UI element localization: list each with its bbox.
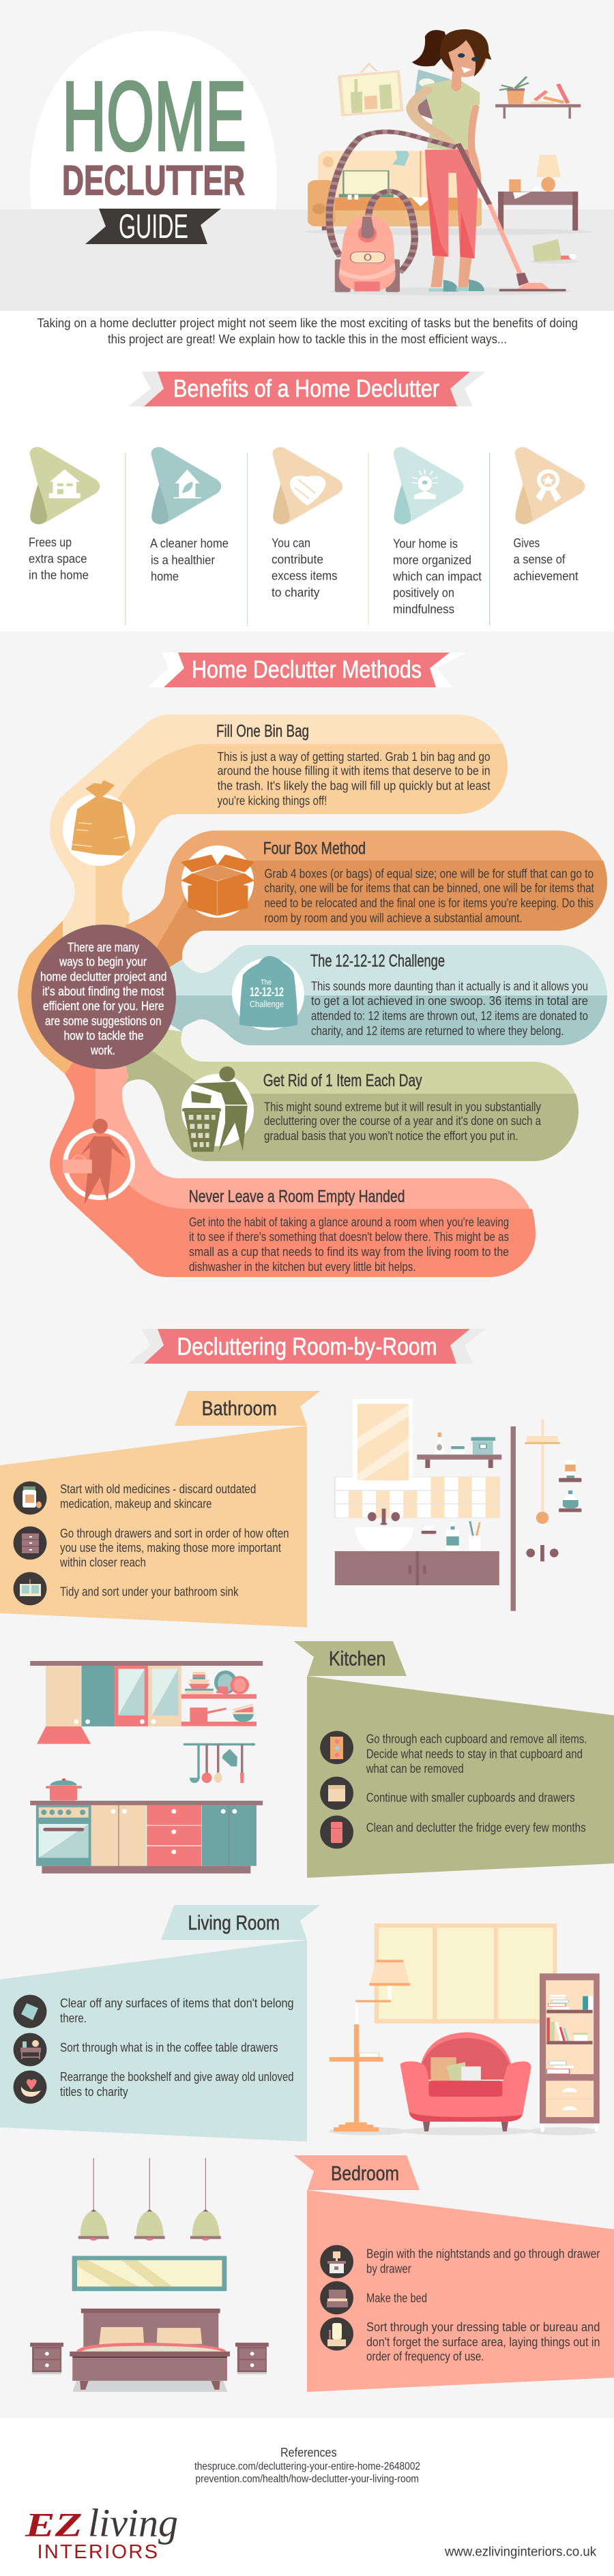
panel: kitchen [30, 1641, 614, 1878]
logo: EZ living interiors [25, 2501, 178, 2563]
icon: bed [320, 2281, 353, 2314]
logo: EZ living interiors: INTERIORS [37, 2541, 158, 2563]
method: never leave a room empty handed [50, 1050, 536, 1277]
benefit text: free space: Frees up [29, 536, 72, 550]
panel: bedroom [30, 2155, 614, 2392]
logo: EZ living interiors: EZ [25, 2505, 82, 2543]
heading: living room: Living Room [188, 1912, 280, 1934]
method: fill one bin bag: around the house filling it with items that deserve to be in [218, 764, 491, 778]
center circle with intro: ways to begin your [59, 955, 147, 969]
icon: hands with heart [14, 2071, 46, 2103]
icon: coffee table [14, 2033, 46, 2066]
method: four box: Four Box Method [263, 839, 366, 858]
method: 12-12-12 challenge: The 12-12-12 Challenge [310, 952, 445, 971]
center circle with intro [31, 925, 176, 1069]
icon: small cupboard [320, 1777, 353, 1810]
intro text: this project are great! We explain how to tackle this in the most efficient ways... [108, 333, 507, 346]
method: fill one bin bag [50, 715, 508, 941]
benefit text: free space: extra space [29, 552, 87, 566]
intro text [37, 316, 578, 346]
method: never leave a room empty handed: small as a cup that needs to find its way from the living room to the [189, 1245, 509, 1259]
bedroom text [366, 2247, 600, 2363]
method: one item each day [109, 1030, 579, 1161]
illustration: kitchen [30, 1661, 263, 1874]
center circle with intro: are some suggestions on [45, 1014, 161, 1028]
benefit text: charity: You can [272, 537, 310, 550]
benefit text: healthier: A cleaner home [150, 537, 229, 550]
kitchen text: what can be removed [366, 1762, 464, 1776]
references [194, 2446, 420, 2485]
banner: methods heading [148, 653, 466, 687]
icon: person carrying bag [63, 1119, 126, 1205]
title: DECLUTTER [62, 157, 245, 203]
icon: nightstand [320, 2245, 353, 2278]
kitchen text: Continue with smaller cupboards and drawers [366, 1791, 575, 1805]
left orange band [18, 920, 109, 1074]
hero background [0, 0, 614, 311]
heading: bedroom: Bedroom [331, 2162, 399, 2185]
references: References [280, 2446, 337, 2459]
icon: teal bag with label: 12-12-12 [250, 985, 284, 999]
method: fill one bin bag: the trash. It's likely the bag will fill up quickly but at least [218, 779, 491, 793]
icon: cardboard box [181, 854, 254, 916]
panel: methods flow [18, 715, 607, 1277]
title [62, 61, 246, 245]
living room text: there. [60, 2011, 87, 2025]
method: 12-12-12 challenge: charity, and 12 items are returned to where they belong. [311, 1024, 564, 1038]
method: never leave a room empty handed: dishwasher in the kitchen but every little bit helps. [189, 1260, 416, 1274]
method: never leave a room empty handed: Get into the habit of taking a glance around a room when you're leaving [189, 1216, 509, 1229]
icon: teal bag with label: Challenge [250, 999, 284, 1009]
center circle with intro: home declutter project and [40, 970, 166, 983]
living room text: Rearrange the bookshelf and give away old unloved [60, 2070, 293, 2084]
illustration: bedroom [30, 2158, 269, 2392]
benefit text: mindfulness: which can impact [392, 570, 482, 584]
method: fill one bin bag: Fill One Bin Bag [216, 722, 309, 741]
benefit text: achievement [513, 537, 579, 583]
method: one item each day: gradual basis that you won't notice the effort you put in. [264, 1129, 518, 1143]
benefit text: charity: contribute [272, 553, 323, 567]
illustration: bathroom [335, 1399, 581, 1611]
banner: room-by-room heading: Decluttering Room-by-Room [177, 1332, 437, 1360]
bedroom text: Make the bed [366, 2291, 427, 2305]
benefit text: mindfulness: more organized [393, 554, 471, 567]
benefit icon: eco house [151, 447, 221, 524]
references: thespruce.com/decluttering-your-entire-home-2648002 [194, 2461, 420, 2472]
method: 12-12-12 challenge: to get a lot achieved in one swoop. 36 items in total are [311, 994, 588, 1008]
method: never leave a room empty handed: Never Leave a Room Empty Handed [189, 1187, 405, 1206]
living room text: Sort through what is in the coffee table drawers [60, 2041, 278, 2054]
bedroom text: by drawer [366, 2262, 411, 2275]
banner: benefits heading: Benefits of a Home Declutter [173, 374, 439, 402]
benefit icon: house [30, 447, 100, 524]
benefit text: mindfulness [392, 537, 482, 616]
method: one item each day: This might sound extreme but it will result in you substantially [264, 1100, 541, 1113]
center circle with intro: There are many [68, 941, 139, 955]
method: fill one bin bag: you're kicking things off! [218, 794, 327, 808]
method: one item each day: decluttering over the course of a year and it's done on such a [264, 1114, 542, 1128]
center circle with intro: work. [90, 1044, 115, 1058]
benefit text: charity: excess items [272, 569, 337, 583]
benefit icon: heart handshake [272, 447, 342, 524]
benefit text: free space [29, 536, 89, 582]
banner: room-by-room heading [128, 1329, 486, 1364]
method: four box [123, 830, 607, 982]
heading: bathroom: Bathroom [202, 1398, 277, 1420]
benefit text: charity: to charity [272, 586, 319, 599]
method: never leave a room empty handed: it to see if there's something that doesn't below there. This might be as [189, 1230, 509, 1244]
title: HOME [62, 61, 246, 171]
icon: drawers [14, 1527, 46, 1559]
panel: benefits [29, 447, 585, 625]
icon: bin bag [71, 780, 130, 856]
icon: teal bag with label [239, 956, 297, 1028]
references: prevention.com/health/how-declutter-your-living-room [195, 2474, 419, 2485]
living room text: Clear off any surfaces of items that don't belong [60, 1996, 293, 2010]
benefit text: mindfulness: Your home is [393, 537, 458, 550]
bathroom text: Go through drawers and sort in order of how often [60, 1527, 289, 1540]
logo: EZ living interiors: living [88, 2501, 178, 2545]
icon: dressing table [320, 2318, 353, 2350]
benefit text: mindfulness: positively on [393, 586, 454, 600]
benefit text: achievement: Gives [513, 537, 540, 550]
center circle with intro: how to tackle the [64, 1029, 143, 1043]
intro text: Taking on a home declutter project might not seem like the most exciting of tasks but the benefits of doing [37, 316, 578, 330]
banner: methods heading: Home Declutter Methods [192, 655, 422, 683]
method: four box: room by room and you will achieve a substantial amount. [265, 912, 523, 925]
benefit text: healthier: home [151, 570, 179, 584]
benefit text: charity [272, 537, 337, 599]
website url: www.ezlivinginteriors.co.uk [444, 2545, 596, 2560]
bathroom text: medication, makeup and skincare [60, 1497, 211, 1511]
method: one item each day: Get Rid of 1 Item Each Day [263, 1071, 422, 1090]
method: 12-12-12 challenge [157, 945, 607, 1045]
bathroom text: you use the items, making those more important [60, 1541, 281, 1555]
panel: living room [0, 1905, 600, 2142]
benefit text: achievement: achievement [513, 569, 579, 583]
benefit icon: award rosette [515, 447, 585, 524]
kitchen text [366, 1733, 587, 1835]
benefit text: achievement: a sense of [513, 553, 566, 567]
benefit text: healthier: is a healthier [151, 554, 215, 567]
bathroom text: Tidy and sort under your bathroom sink [60, 1585, 239, 1599]
bathroom text: Start with old medicines - discard outdated [60, 1482, 256, 1496]
living room text [60, 1996, 293, 2099]
icon: sink [14, 1572, 46, 1605]
illustration: living room [329, 1923, 600, 2136]
living room text: titles to charity [60, 2085, 128, 2099]
title: GUIDE [119, 207, 188, 245]
icon: cushion [14, 1995, 46, 2028]
bathroom text: within closer reach [59, 1556, 146, 1570]
center circle with intro: efficient one for you. Here [43, 1000, 164, 1013]
icon: cupboard [320, 1731, 353, 1764]
benefit text: mindfulness: mindfulness [393, 602, 454, 616]
icon: medicine [14, 1482, 46, 1514]
heading: kitchen: Kitchen [329, 1648, 385, 1671]
illustration: woman vacuuming in a living room [304, 29, 594, 295]
benefit text: healthier [150, 537, 229, 584]
benefit icon: mindful head [394, 447, 464, 524]
panel: bathroom [0, 1391, 581, 1628]
bathroom text [59, 1482, 289, 1599]
icon: fridge [320, 1816, 353, 1848]
bedroom text: order of frequency of use. [366, 2350, 484, 2363]
center circle with intro: it's about finding the most [42, 985, 164, 998]
method: fill one bin bag: This is just a way of getting started. Grab 1 bin bag and go [218, 750, 491, 764]
icon: person using bin [182, 1066, 248, 1152]
icon: teal bag with label: The [261, 978, 272, 987]
bedroom text: Sort through your dressing table or bureau and [366, 2320, 600, 2334]
benefit text: free space: in the home [29, 568, 89, 582]
